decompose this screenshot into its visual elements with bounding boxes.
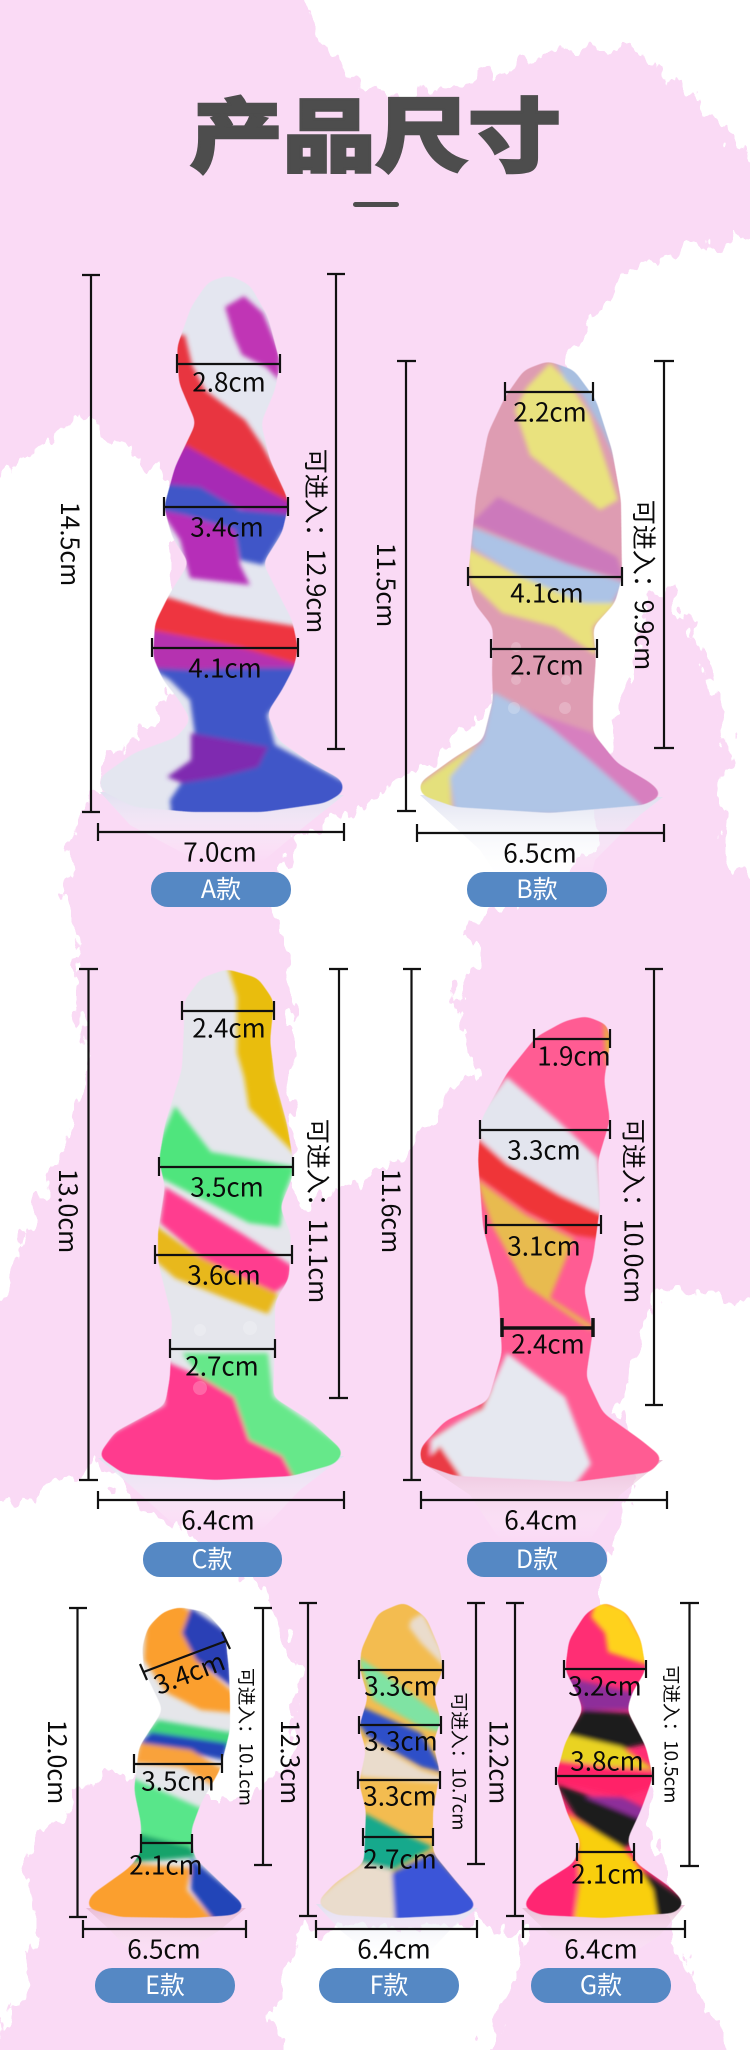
height line 12.3cm: 12.3cm [273, 1720, 309, 1804]
width 2.4cm [502, 1318, 593, 1362]
width 4.1cm [468, 567, 622, 610]
width 2.7cm [491, 639, 597, 682]
width 2.7cm: 2.7cm [510, 646, 584, 682]
width 3.3cm: 3.3cm [364, 1666, 438, 1704]
width 2.7cm: 2.7cm [363, 1840, 437, 1876]
insertable length line 10.0cm [616, 969, 663, 1405]
product shape C [90, 965, 350, 1485]
base width 6.4cm: 6.4cm [181, 1500, 255, 1538]
insertable length line 10.0cm: 可进入：10.0cm [616, 1119, 652, 1303]
insertable length line 11.1cm: 可进入：11.1cm [301, 1119, 337, 1303]
product shape G [526, 1604, 682, 1918]
width 3.3cm [480, 1120, 610, 1168]
label pill D [467, 1540, 607, 1577]
product shape F [320, 1604, 474, 1918]
width 3.5cm: 3.5cm [190, 1168, 264, 1204]
base width 6.4cm: 6.4cm [564, 1930, 638, 1966]
width 2.1cm: 2.1cm [571, 1854, 645, 1892]
width 2.4cm: 2.4cm [192, 1008, 266, 1046]
height line 14.5cm: 14.5cm [53, 502, 89, 586]
base width 7.0cm: 7.0cm [183, 832, 257, 870]
width 2.2cm [505, 382, 593, 430]
width 3.5cm [134, 1754, 222, 1798]
reflection E [86, 1908, 246, 1962]
width 1.9cm: 1.9cm [537, 1036, 611, 1074]
width 2.2cm: 2.2cm [513, 392, 587, 430]
width 2.4cm [182, 1001, 274, 1046]
height line 12.3cm [273, 1603, 317, 1916]
reflection D [421, 1460, 663, 1540]
insertable length line 9.9cm: 可进入：9.9cm [627, 500, 663, 670]
base width 6.4cm [523, 1920, 685, 1966]
height line 12.2cm [482, 1603, 524, 1916]
panel: model D [374, 969, 670, 1577]
width 3.4cm: 3.4cm [190, 508, 264, 544]
base width 6.5cm: 6.5cm [503, 834, 577, 870]
base width 6.4cm: 6.4cm [504, 1500, 578, 1538]
insertable length line 10.7cm: 可进入：10.7cm [446, 1693, 474, 1830]
reflection B [420, 795, 663, 880]
width 3.1cm: 3.1cm [507, 1226, 581, 1264]
panel: model G [482, 1598, 699, 2003]
base width 6.4cm [316, 1920, 477, 1966]
width 3.3cm: 3.3cm [364, 1722, 438, 1758]
panel: model A [53, 270, 350, 907]
insertable length line 12.9cm: 可进入：12.9cm [299, 449, 335, 633]
width 3.8cm: 3.8cm [570, 1742, 644, 1778]
height line 12.0cm: 12.0cm [40, 1720, 76, 1804]
insertable length line 12.9cm [299, 274, 345, 749]
label pill C [143, 1540, 282, 1577]
height line 11.6cm [374, 969, 421, 1480]
height line 13.0cm [51, 969, 98, 1480]
height line 14.5cm [53, 275, 100, 812]
label pill E [95, 1966, 235, 2003]
height line 13.0cm: 13.0cm [51, 1169, 87, 1253]
width 3.4cm [164, 497, 288, 544]
height line 11.5cm [369, 361, 416, 811]
insertable length line 10.5cm [658, 1603, 699, 1866]
reflection F [316, 1904, 478, 1962]
insertable length line 11.1cm [301, 969, 348, 1398]
height line 12.0cm [40, 1608, 87, 1917]
width 2.8cm: 2.8cm [192, 362, 266, 400]
width 3.5cm [159, 1157, 293, 1204]
width 3.3cm: 3.3cm [363, 1776, 437, 1814]
base width 6.4cm: 6.4cm [357, 1930, 431, 1966]
width 4.1cm [152, 638, 298, 686]
base width 6.5cm: 6.5cm [127, 1930, 201, 1966]
base width 7.0cm [98, 823, 344, 870]
width 3.6cm: 3.6cm [187, 1256, 261, 1292]
label pill B [467, 870, 607, 907]
base width 6.4cm [421, 1491, 667, 1538]
panel: model C [51, 965, 350, 1577]
label pill C: C款 [192, 1540, 232, 1576]
width 3.8cm [556, 1742, 653, 1785]
width 4.1cm: 4.1cm [510, 574, 584, 610]
width 2.4cm: 2.4cm [511, 1324, 585, 1362]
width 3.6cm [155, 1245, 292, 1292]
height line 11.5cm: 11.5cm [369, 543, 405, 627]
width 3.5cm: 3.5cm [141, 1762, 215, 1798]
panel: model F [273, 1598, 485, 2003]
width 2.7cm: 2.7cm [185, 1346, 259, 1384]
insertable length line 10.1cm: 可进入：10.1cm [234, 1668, 260, 1806]
insertable length line 10.5cm: 可进入：10.5cm [658, 1666, 686, 1803]
reflection C [98, 1456, 344, 1530]
label pill E: E款 [145, 1966, 185, 2002]
width 3.1cm [486, 1215, 601, 1264]
label pill F [319, 1966, 459, 2003]
width 4.1cm: 4.1cm [188, 648, 262, 686]
base width 6.5cm [417, 824, 664, 870]
product shape B [420, 362, 658, 813]
product shape D [415, 1010, 670, 1490]
angled width 3.4cm: 3.4cm [148, 1642, 230, 1702]
label pill B: B款 [516, 870, 558, 906]
panel: model B [369, 355, 674, 907]
product shape A [90, 270, 350, 820]
label pill G: G款 [580, 1966, 622, 2002]
base width 6.4cm [98, 1491, 344, 1538]
reflection G [522, 1905, 685, 1962]
width 3.3cm: 3.3cm [507, 1130, 581, 1168]
label pill A [151, 870, 291, 907]
height line 12.2cm: 12.2cm [482, 1720, 518, 1804]
label pill G [531, 1966, 671, 2003]
width 2.8cm [177, 354, 280, 400]
product shape E [88, 1608, 242, 1918]
label pill A: A款 [201, 870, 241, 906]
panel: model E [40, 1600, 272, 2003]
width 3.2cm: 3.2cm [568, 1666, 642, 1704]
height line 11.6cm: 11.6cm [374, 1169, 410, 1253]
title: 产品尺寸 [190, 73, 561, 189]
title underline dash [353, 202, 399, 207]
base width 6.5cm [83, 1920, 246, 1966]
insertable length line 10.1cm [234, 1608, 272, 1865]
insertable length line 10.7cm [446, 1603, 485, 1864]
width 2.1cm: 2.1cm [129, 1846, 203, 1882]
reflection A [100, 792, 344, 862]
width 2.7cm [170, 1339, 275, 1384]
label pill F: F款 [370, 1966, 408, 2002]
insertable length line 9.9cm [627, 361, 674, 748]
label pill D: D款 [516, 1540, 558, 1576]
